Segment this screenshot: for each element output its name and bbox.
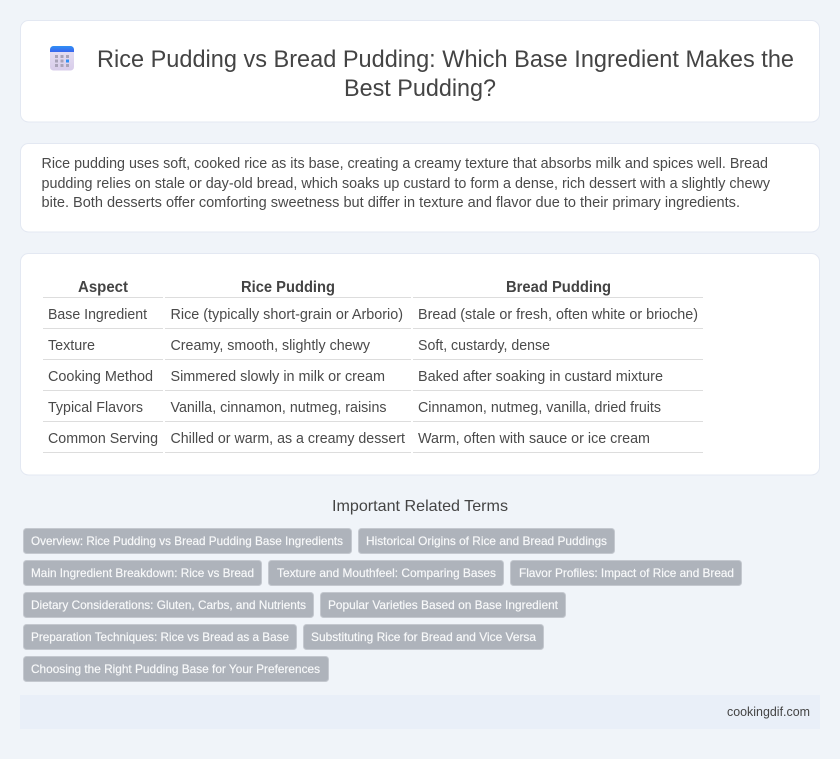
text block: description: bite. Both desserts offer comforting sweetness but differ in texture and flavor due to their primary ingredients.	[42, 195, 740, 211]
tag: substituting: Substituting Rice for Bread and Vice Versa	[311, 630, 536, 644]
tag: substituting	[304, 624, 544, 650]
table row: cooking method	[48, 369, 663, 385]
text block: description: pudding relies on stale or day-old bread, which soaks up custard to form a dense, rich dessert with a slightly chewy	[42, 176, 771, 192]
tag: texture and mouthfeel: Texture and Mouthfeel: Comparing Bases	[277, 566, 496, 580]
panel: comparison table	[20, 254, 820, 475]
tag: historical origins	[358, 528, 614, 554]
table row: common serving	[48, 431, 650, 447]
table row: base ingredient	[48, 307, 698, 323]
table row: cooking method: Simmered slowly in milk or cream	[170, 369, 385, 385]
table row: typical flavors: Typical Flavors	[48, 400, 143, 416]
tag: dietary considerations	[24, 592, 314, 618]
tag: historical origins: Historical Origins of Rice and Bread Puddings	[366, 534, 607, 548]
tag: popular varieties	[320, 592, 566, 618]
table row: common serving: Warm, often with sauce or ice cream	[418, 431, 650, 447]
text block: description: Rice pudding uses soft, cooked rice as its base, creating a creamy texture that absorbs milk and spices well. Bread	[42, 156, 768, 172]
tag: flavor profiles: Flavor Profiles: Impact of Rice and Bread	[519, 566, 734, 580]
table row: base ingredient: Bread (stale or fresh, often white or brioche)	[418, 307, 698, 323]
table row: typical flavors	[48, 400, 661, 416]
tag: main ingredient	[24, 560, 262, 586]
table row: texture	[48, 338, 550, 354]
title: Rice Pudding vs Bread Pudding: Which Base Ingredient Makes the	[97, 46, 794, 73]
tag: preparation techniques: Preparation Techniques: Rice vs Bread as a Base	[31, 630, 289, 644]
table row: common serving: Common Serving	[48, 431, 158, 447]
table row: cooking method: Cooking Method	[48, 369, 153, 385]
tag: main ingredient: Main Ingredient Breakdown: Rice vs Bread	[31, 566, 254, 580]
tag: flavor profiles	[510, 560, 742, 586]
table header: Rice Pudding	[241, 279, 335, 296]
title	[97, 46, 794, 102]
tag: overview	[24, 528, 352, 554]
table header: Bread Pudding	[506, 279, 611, 296]
table row: typical flavors: Vanilla, cinnamon, nutmeg, raisins	[170, 400, 386, 416]
panel: description	[20, 144, 820, 232]
tag: preparation techniques	[24, 624, 296, 650]
table header: Aspect	[78, 279, 129, 296]
table row: typical flavors: Cinnamon, nutmeg, vanilla, dried fruits	[418, 400, 661, 416]
table row: common serving: Chilled or warm, as a creamy dessert	[170, 431, 405, 447]
footer	[20, 695, 820, 729]
table row: texture: Creamy, smooth, slightly chewy	[170, 338, 371, 354]
table row: texture: Soft, custardy, dense	[418, 338, 550, 354]
text block: description	[42, 156, 771, 211]
table row: base ingredient: Rice (typically short-grain or Arborio)	[170, 307, 403, 323]
table row: cooking method: Baked after soaking in custard mixture	[418, 369, 663, 385]
footer: cookingdif.com	[727, 704, 810, 719]
tag: dietary considerations: Dietary Considerations: Gluten, Carbs, and Nutrients	[31, 598, 306, 612]
tag: overview: Overview: Rice Pudding vs Bread Pudding Base Ingredients	[31, 534, 343, 548]
table header	[78, 279, 611, 296]
table row: texture: Texture	[48, 338, 95, 354]
panel: title card	[20, 20, 820, 122]
tag: popular varieties: Popular Varieties Based on Base Ingredient	[328, 598, 559, 612]
icon: calendar	[50, 46, 74, 70]
tag: choosing the base	[24, 656, 328, 682]
heading: related terms: Important Related Terms	[332, 498, 508, 515]
table row: base ingredient: Base Ingredient	[48, 307, 147, 323]
tag: choosing the base: Choosing the Right Pudding Base for Your Preferences	[31, 662, 320, 676]
title: Best Pudding?	[344, 75, 496, 102]
panel: related term tags	[24, 528, 742, 682]
tag: texture and mouthfeel	[268, 560, 504, 586]
